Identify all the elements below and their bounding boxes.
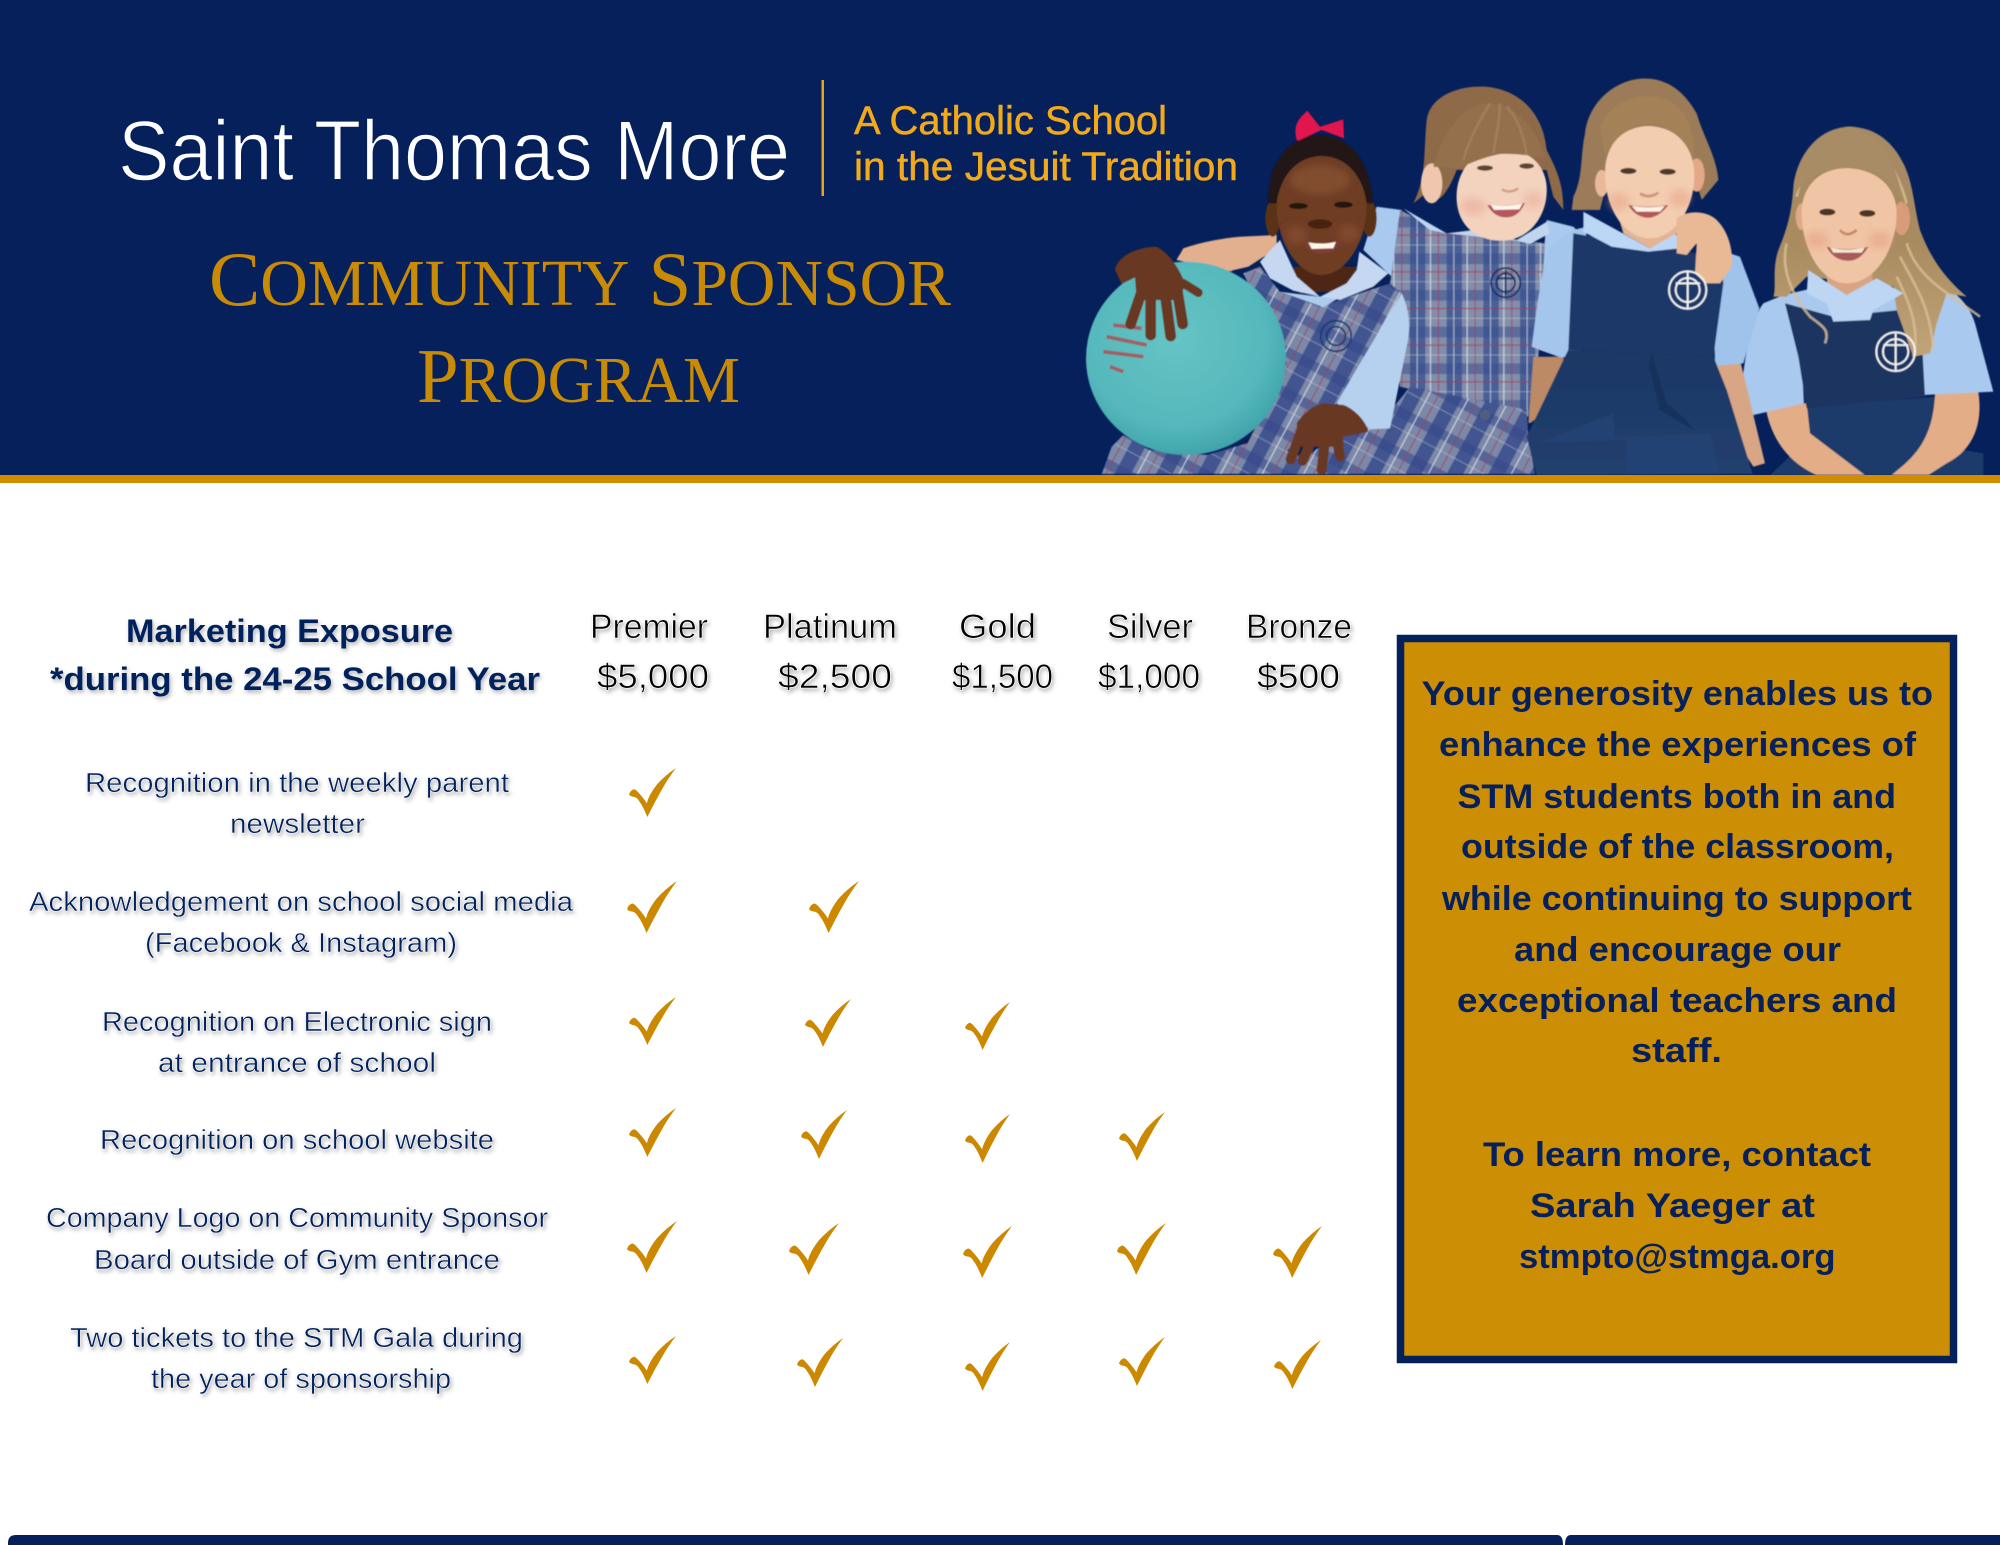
row labels: Two tickets to the STM Gala during [70,1322,523,1353]
student one [1086,111,1409,474]
table header: tiers and prices [590,608,1352,696]
table header: marketing exposure: Marketing Exposure [126,613,453,649]
title [209,236,951,419]
row labels: Recognition in the weekly parent [85,767,509,798]
gold band [0,475,2000,483]
tagline: in the Jesuit Tradition [854,145,1238,189]
callout message: outside of the classroom, [1461,828,1894,866]
row 6 checks [629,1336,1321,1391]
callout contact: stmpto@stmga.org [1519,1238,1836,1276]
photo: four students with ball [1086,78,1993,475]
footer bar [8,1535,2000,1545]
row labels: newsletter [230,808,365,839]
table header: tiers and prices: Silver [1107,608,1193,646]
table header: tiers and prices: Platinum [763,608,897,646]
callout message: and encourage our [1514,931,1841,969]
table header: tiers and prices: $5,000 [597,658,709,696]
row labels: Recognition on school website [100,1124,494,1155]
callout panel [1400,638,1954,1360]
student four [1740,127,1993,475]
row labels: at entrance of school [158,1047,436,1078]
table header: tiers and prices: $2,500 [778,658,892,696]
logo: Saint Thomas More: Saint Thomas More [118,104,790,199]
callout contact: To learn more, contact [1483,1136,1871,1174]
callout message: while continuing to support [1441,880,1912,918]
row 5 checks [627,1221,1322,1278]
ball [1086,262,1286,455]
table header: tiers and prices: Bronze [1246,608,1352,646]
row labels [29,767,573,1394]
row labels: Company Logo on Community Sponsor [46,1202,548,1233]
callout contact: Sarah Yaeger at [1530,1187,1815,1225]
table header: tiers and prices: Premier [590,608,708,646]
row 4 checks [629,1108,1165,1163]
callout message: staff. [1631,1032,1722,1070]
row 1 checks [629,768,676,817]
row labels: Board outside of Gym entrance [94,1244,500,1275]
callout contact [1483,1136,1871,1276]
table header: tiers and prices: $1,500 [952,658,1053,696]
callout message: exceptional teachers and [1457,982,1897,1020]
hand on lap [1291,403,1368,470]
student two [1177,87,1580,474]
logo divider [822,80,824,196]
check marks grid [627,768,1322,1391]
title: PROGRAM [417,333,740,419]
callout message: enhance the experiences of [1439,726,1917,764]
callout message: STM students both in and [1458,778,1896,816]
table header: marketing exposure: *during the 24-25 School Year [50,661,540,697]
hand on ball [1115,247,1198,336]
table header: tiers and prices: Gold [959,608,1036,646]
header panel [0,0,2000,475]
row labels: the year of sponsorship [151,1363,451,1394]
title: COMMUNITY SPONSOR [209,236,951,322]
tagline [854,99,1238,189]
callout message: Your generosity enables us to [1422,675,1933,713]
row 3 checks [629,997,1010,1050]
row 2 checks [627,881,859,933]
table header: tiers and prices: $1,000 [1098,658,1200,696]
tagline: A Catholic School [854,99,1167,143]
row labels: (Facebook & Instagram) [145,927,457,958]
table header: marketing exposure [50,613,540,697]
student three [1527,78,1765,475]
row labels: Recognition on Electronic sign [102,1006,492,1037]
callout message [1422,675,1933,1070]
table header: tiers and prices: $500 [1257,658,1340,696]
row labels: Acknowledgement on school social media [29,886,573,917]
